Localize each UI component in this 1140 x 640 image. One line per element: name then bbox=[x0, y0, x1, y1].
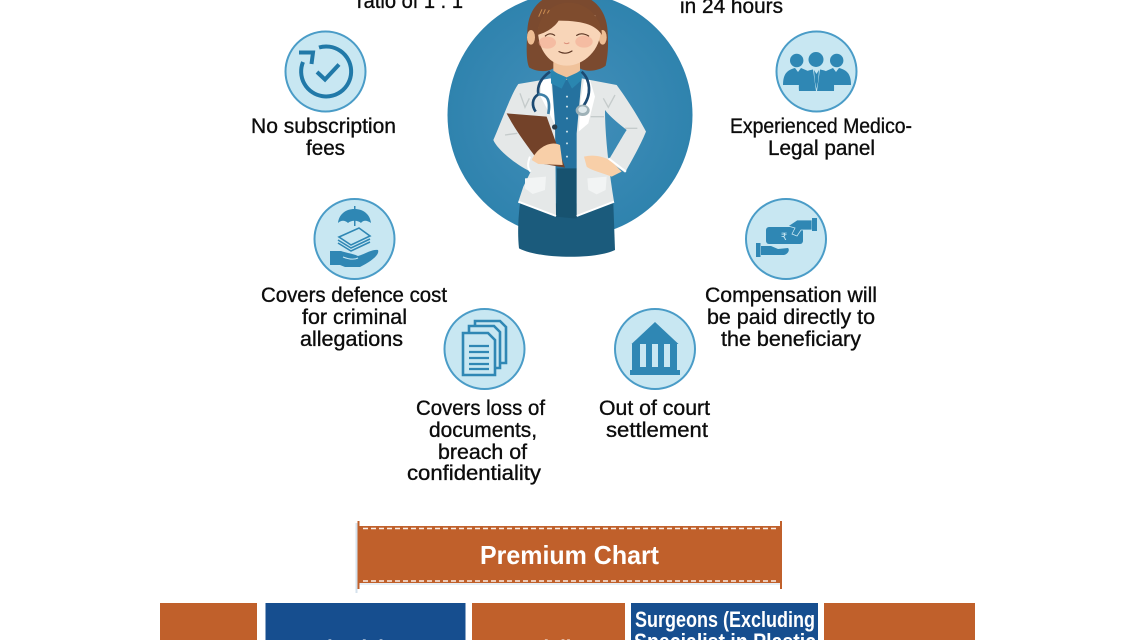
lapels bbox=[541, 78, 595, 132]
feature: compensation paid directly: the beneficiary bbox=[721, 328, 862, 351]
table header cell 3 bbox=[472, 603, 625, 640]
feature: out of court settlement bbox=[599, 309, 710, 442]
feature: covers defence cost: Covers defence cost bbox=[261, 284, 447, 307]
feature: compensation paid directly: be paid directly to bbox=[707, 306, 875, 329]
table header cell 5 bbox=[824, 603, 975, 640]
coat creases bbox=[505, 93, 637, 135]
illustration: doctor in blue circle bbox=[448, 0, 692, 257]
lab coat left bbox=[493, 78, 556, 216]
feature: covers loss of documents: breach of bbox=[438, 441, 527, 464]
feature: covers loss of documents: confidentiality bbox=[407, 462, 542, 485]
feature: out of court settlement: Out of court bbox=[599, 397, 710, 420]
feature: no subscription fees bbox=[251, 32, 396, 160]
table header cell 4 bbox=[631, 603, 818, 640]
clipboard bbox=[507, 113, 565, 168]
feature: no subscription fees: No subscription bbox=[251, 115, 396, 138]
shirt buttons bbox=[566, 96, 568, 158]
feature: experienced medico-legal panel bbox=[730, 32, 912, 160]
neck bbox=[553, 58, 580, 80]
back hair bbox=[527, 0, 608, 71]
left cuff and hand bbox=[532, 144, 563, 165]
feature: covers defence cost: for criminal bbox=[302, 306, 407, 329]
table header cell 1 bbox=[160, 603, 257, 640]
heading: Premium Chart bbox=[480, 540, 659, 570]
right hand and cuff bbox=[584, 156, 622, 177]
icon: three people in suits bbox=[776, 32, 856, 112]
feature: no subscription fees: fees bbox=[306, 137, 345, 160]
ears bbox=[527, 30, 535, 45]
table header cell 2 bbox=[266, 603, 466, 640]
coat hem trim bbox=[518, 202, 614, 216]
stethoscope bbox=[533, 72, 589, 114]
shirt bbox=[551, 78, 582, 176]
face bbox=[538, 15, 601, 66]
feature: experienced medico-legal panel: Legal panel bbox=[768, 137, 875, 160]
icon: stack of documents bbox=[444, 309, 524, 389]
icon: renewal arrow with check bbox=[286, 32, 366, 112]
feature: compensation paid directly: Compensation will bbox=[705, 284, 877, 307]
pockets bbox=[525, 177, 607, 194]
feature: covers loss of documents bbox=[407, 309, 545, 485]
stethoscope chestpiece bbox=[576, 105, 590, 116]
table header cell 4: Surgeons (Excluding bbox=[635, 607, 815, 632]
feature: compensation paid directly bbox=[705, 199, 877, 351]
eyes, nose and smile bbox=[545, 34, 589, 53]
feature: out of court settlement: settlement bbox=[606, 419, 708, 442]
fringe bbox=[537, 3, 602, 35]
icon: courthouse bbox=[615, 309, 695, 389]
banner: premium chart bbox=[356, 521, 782, 593]
skirt bbox=[518, 203, 615, 257]
icon: hands passing rupee note: ₹ bbox=[781, 232, 787, 243]
icon: umbrella, notes and hand bbox=[314, 199, 394, 279]
feature: covers loss of documents: documents, bbox=[429, 419, 537, 442]
feature: experienced medico-legal panel: Experienced Medico- bbox=[730, 115, 912, 138]
feature: covers defence cost: allegations bbox=[300, 328, 403, 351]
collar bbox=[551, 71, 582, 89]
icon: hands passing rupee note bbox=[746, 199, 826, 279]
feature: covers loss of documents: Covers loss of bbox=[416, 397, 545, 420]
lab coat right bbox=[577, 78, 646, 216]
feature: covers defence cost bbox=[261, 199, 447, 351]
